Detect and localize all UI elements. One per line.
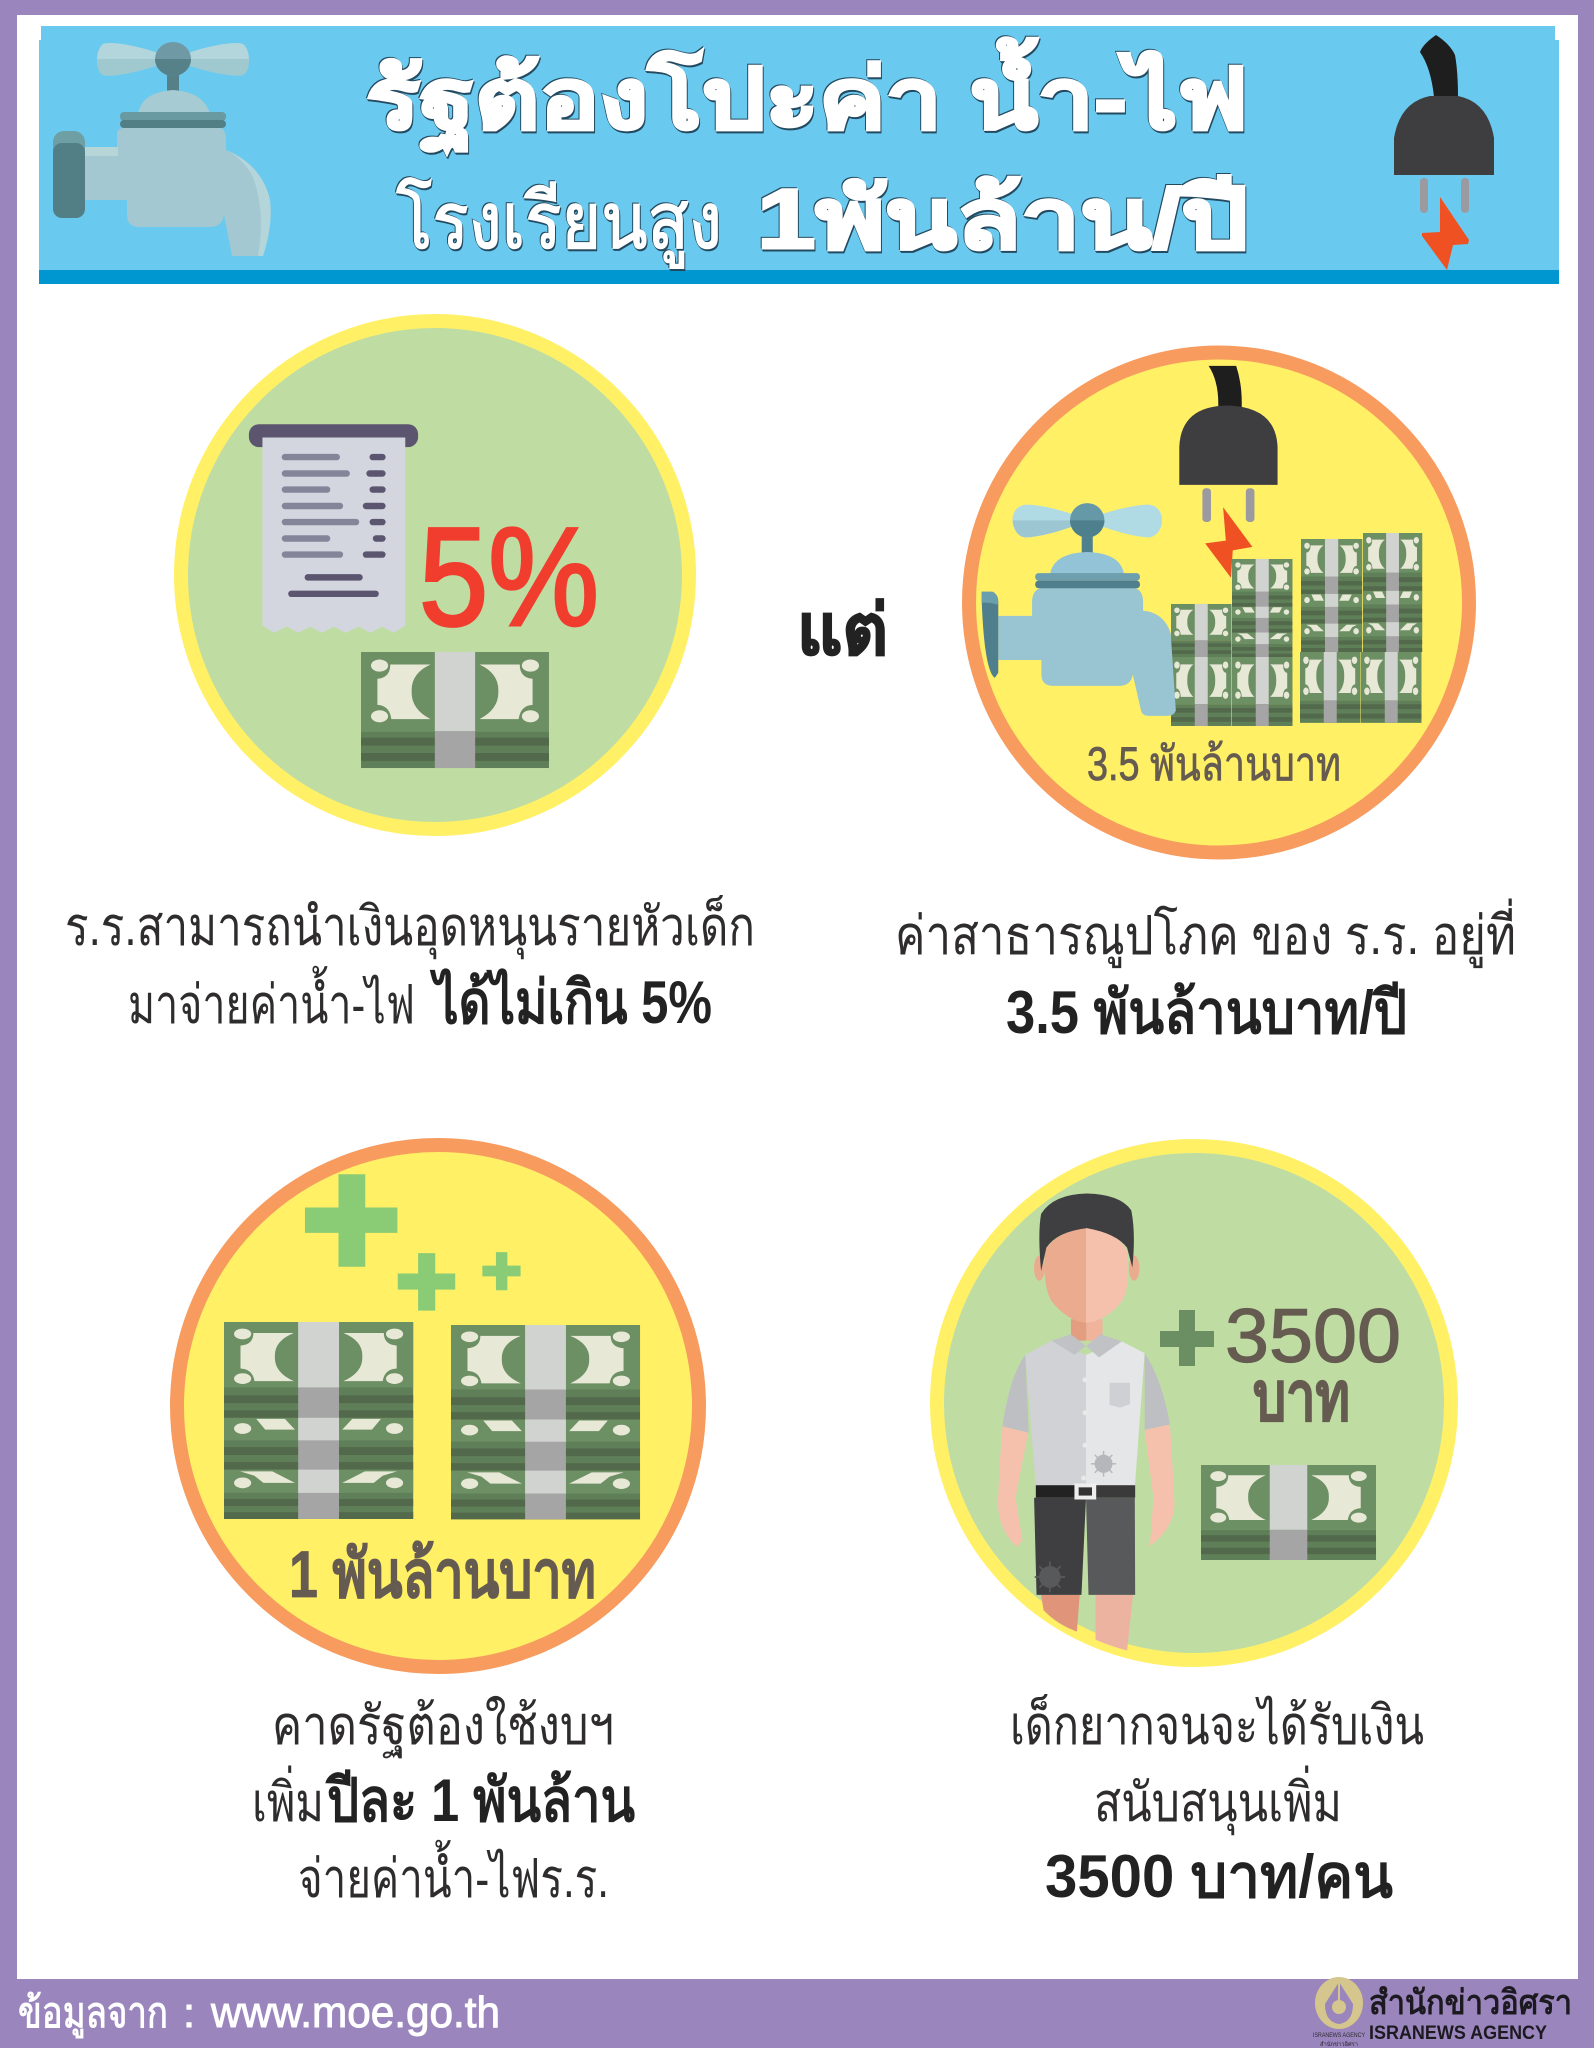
icon: banknote [361,652,549,768]
icon: plus sign [1160,1310,1214,1366]
heading: but: แต่ [797,591,888,669]
text block: utilities caption [895,898,1516,1046]
icon: faucet [982,503,1176,716]
panel: header banner [39,26,1559,284]
text block: 5 percent caption: ร.ร.สามารถนำเงินอุดหนุนรายหัวเด็ก [65,895,755,960]
panel: utilities 3.5 billion [969,352,1469,852]
title line 2 bold: 1พันล้าน/ปี [757,172,1248,266]
text: 5%: 5% [419,498,599,655]
title line 2 regular: โรงเรียนสูง [396,177,722,268]
icon: header faucet [53,42,271,256]
footer: source: : [183,1989,195,2036]
panel: 1 billion baht [177,1145,699,1667]
title line 1: รัฐต้องโปะค่า น้ำ-ไฟ [366,37,1248,154]
text: agency name English: ISRANEWS AGENCY [1369,2023,1547,2044]
text block: utilities caption: 3.5 พันล้านบาท/ปี [1006,979,1407,1046]
text: 3500: 3500 [1225,1294,1401,1379]
text block: budget caption: จ่ายค่าน้ำ-ไฟร.ร. [298,1840,609,1909]
panel: 5 percent limit [181,321,689,829]
circle: green badge [937,1146,1451,1660]
footer: source [18,1988,500,2038]
icon: money stacks [1171,533,1422,726]
icon: plus signs [305,1174,521,1311]
text block: 5 percent caption: ได้ไม่เกิน 5% [429,967,712,1036]
text block: 5 percent caption [65,895,755,1036]
text block: budget caption: เพิ่ม [252,1765,324,1833]
footer: agency logo [1313,1977,1572,2048]
icon: banknote [1201,1465,1376,1560]
icon: left money stack [224,1322,413,1519]
footer: source: ข้อมูลจาก [18,1989,168,2038]
icon: plug [1179,366,1278,578]
circle: green badge [181,321,689,829]
text: agency name Thai: สำนักข่าวอิศรา [1369,1984,1572,2022]
circle: yellow badge [177,1145,699,1667]
text block: budget caption [252,1695,635,1909]
text: baht: บาท [1253,1359,1350,1435]
icon: right money stack [451,1325,640,1519]
circle: yellow badge [969,352,1469,852]
text: small emblem caption: ISRANEWS AGENCY [1313,2033,1365,2039]
text block: student caption [1010,1694,1424,1910]
icon: header plug [1394,35,1494,270]
text: small emblem caption Thai: สำนักข่าวอิศรา [1320,2041,1358,2048]
text block: student caption: เด็กยากจนจะได้รับเงิน [1010,1694,1424,1756]
text block: student caption: สนับสนุนเพิ่ม [1094,1765,1342,1836]
panel: student 3500 baht [937,1146,1451,1660]
text block: budget caption: ปีละ 1 พันล้าน [325,1767,635,1834]
icon: receipt [249,424,418,633]
text block: student caption: 3500 บาท/คน [1045,1843,1393,1910]
text: 3.5 billion baht: 3.5 พันล้านบาท [1087,737,1341,790]
icon: pen nib emblem [1315,1977,1363,2029]
icon: student [998,1194,1174,1651]
text: 1 billion baht: 1 พันล้านบาท [289,1537,596,1611]
text block: 5 percent caption: มาจ่ายค่าน้ำ-ไฟ [128,966,415,1035]
text block: budget caption: คาดรัฐต้องใช้งบฯ [272,1695,614,1758]
footer: source: www.moe.go.th [210,1988,500,2037]
